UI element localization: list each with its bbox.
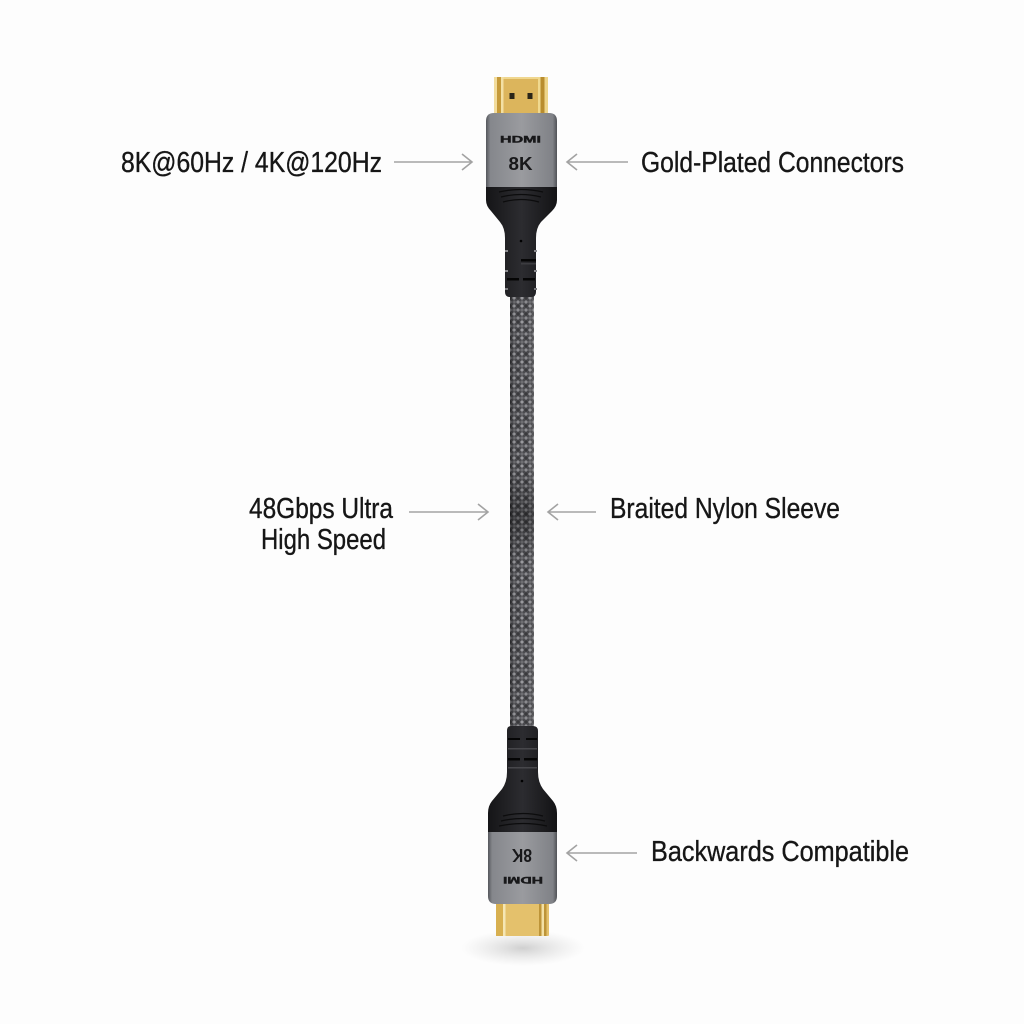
top grey metal shell: HDMI	[500, 134, 541, 146]
label: gold-plated connectors: Gold-Plated Connectors	[641, 147, 904, 179]
top black strain relief	[486, 186, 557, 297]
label: braided sleeve: Braited Nylon Sleeve	[610, 493, 840, 525]
arrow: backwards compatible	[567, 845, 637, 861]
bottom HDMI connector	[488, 726, 557, 936]
bottom grey metal shell: 8K	[512, 845, 532, 865]
bottom black strain relief	[488, 726, 557, 833]
bottom grey metal shell: HDMI	[503, 874, 543, 885]
braided nylon cable	[510, 292, 534, 732]
bottom grey metal shell	[488, 832, 557, 904]
top gold plug	[494, 77, 548, 113]
arrow: gold-plated connectors	[567, 154, 628, 170]
arrow: braided sleeve	[548, 504, 596, 520]
top HDMI connector	[486, 77, 557, 297]
label: backwards compatible: Backwards Compatible	[651, 836, 909, 868]
label: bandwidth: 48Gbps Ultra	[249, 493, 394, 525]
bottom gold plug	[496, 903, 549, 936]
top grey metal shell	[486, 113, 557, 187]
arrow: resolution	[394, 154, 472, 170]
label: resolution: 8K@60Hz / 4K@120Hz	[121, 147, 382, 179]
label: bandwidth: High Speed	[261, 524, 386, 556]
floor shadow	[461, 930, 585, 966]
label: bandwidth	[249, 493, 394, 556]
top grey metal shell: 8K	[508, 154, 532, 174]
arrow: bandwidth	[409, 504, 488, 520]
